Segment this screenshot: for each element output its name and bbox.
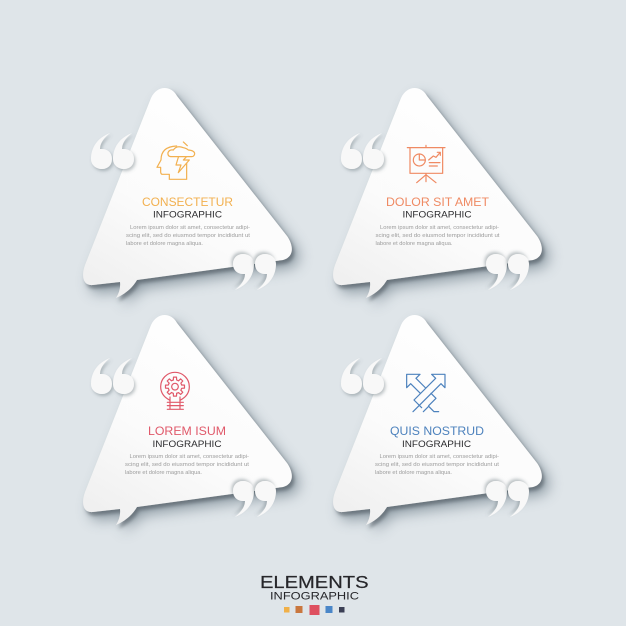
opening quote marks xyxy=(91,358,134,394)
panel: consectetur xyxy=(83,88,299,306)
closing quote marks xyxy=(233,254,276,290)
body text: labore et dolore magna aliqua. xyxy=(126,241,203,247)
speech bubble card xyxy=(83,315,292,525)
body text: labore et dolore magna aliqua. xyxy=(375,470,452,476)
colour swatches xyxy=(284,605,344,615)
card soft shadow xyxy=(90,323,299,533)
title: CONSECTETUR xyxy=(142,195,233,209)
card soft shadow xyxy=(340,96,549,306)
body text xyxy=(375,454,499,476)
title: QUIS NOSTRUD xyxy=(390,424,484,438)
icon: head with storm cloud xyxy=(157,142,195,179)
title: DOLOR SIT AMET xyxy=(386,195,490,209)
card soft shadow xyxy=(90,96,299,306)
closing quote marks xyxy=(486,254,529,290)
subtitle: INFOGRAPHIC xyxy=(153,210,223,220)
subtitle: INFOGRAPHIC xyxy=(402,439,472,449)
body text: labore et dolore magna aliqua. xyxy=(125,470,202,476)
speech bubble card xyxy=(333,88,542,298)
body text: labore et dolore magna aliqua. xyxy=(376,241,453,247)
footer title: ELEMENTS xyxy=(260,572,368,592)
panel: quis nostrud xyxy=(333,315,549,533)
panel: dolor sit amet xyxy=(333,88,549,306)
body text: scing elit, sed do eiusmod tempor incididunt ut xyxy=(126,233,250,239)
body text: Lorem ipsum dolor sit amet, consectetur adipi- xyxy=(380,225,499,231)
speech bubble card xyxy=(83,88,292,298)
title: LOREM ISUM xyxy=(148,424,226,438)
body text: Lorem ipsum dolor sit amet, consectetur adipi- xyxy=(130,454,249,460)
icon: presentation board xyxy=(407,145,445,183)
icon: light bulb with gear xyxy=(161,372,189,409)
body text: Lorem ipsum dolor sit amet, consectetur adipi- xyxy=(380,454,499,460)
opening quote marks xyxy=(91,133,134,169)
footer subtitle: INFOGRAPHIC xyxy=(270,590,359,602)
subtitle: INFOGRAPHIC xyxy=(152,439,222,449)
closing quote marks xyxy=(233,481,276,517)
body text xyxy=(126,225,250,247)
body text: scing elit, sed do eiusmod tempor incididunt ut xyxy=(125,462,249,468)
body text: scing elit, sed do eiusmod tempor incididunt ut xyxy=(376,233,500,239)
subtitle: INFOGRAPHIC xyxy=(402,210,472,220)
closing quote marks xyxy=(486,481,529,517)
speech bubble card xyxy=(333,315,542,525)
icon: crossing arrows xyxy=(407,374,445,412)
footer logo xyxy=(260,572,368,615)
opening quote marks xyxy=(341,358,384,394)
body text: Lorem ipsum dolor sit amet, consectetur adipi- xyxy=(130,225,250,231)
body text xyxy=(376,225,500,247)
body text xyxy=(125,454,249,476)
card soft shadow xyxy=(340,323,549,533)
body text: scing elit, sed do eiusmod tempor incididunt ut xyxy=(375,462,499,468)
opening quote marks xyxy=(341,133,384,169)
panel: lorem isum xyxy=(83,315,299,533)
